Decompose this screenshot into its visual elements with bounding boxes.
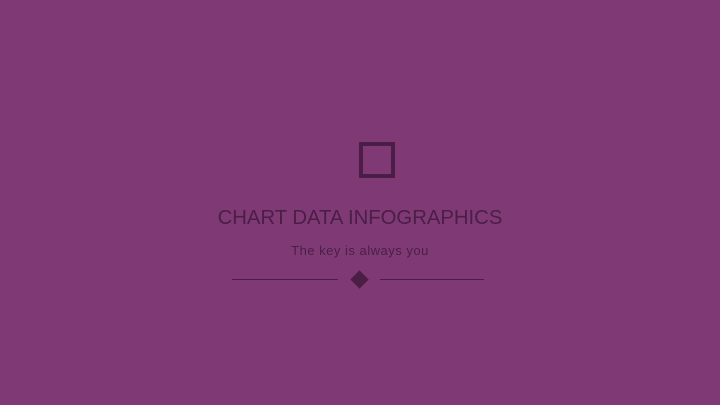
icon: diamond: [350, 270, 368, 289]
divider with diamond: [232, 270, 484, 288]
icon: square: [359, 142, 395, 178]
subtitle: The key is always you: [291, 243, 429, 258]
title: CHART DATA INFOGRAPHICS: [218, 207, 502, 229]
